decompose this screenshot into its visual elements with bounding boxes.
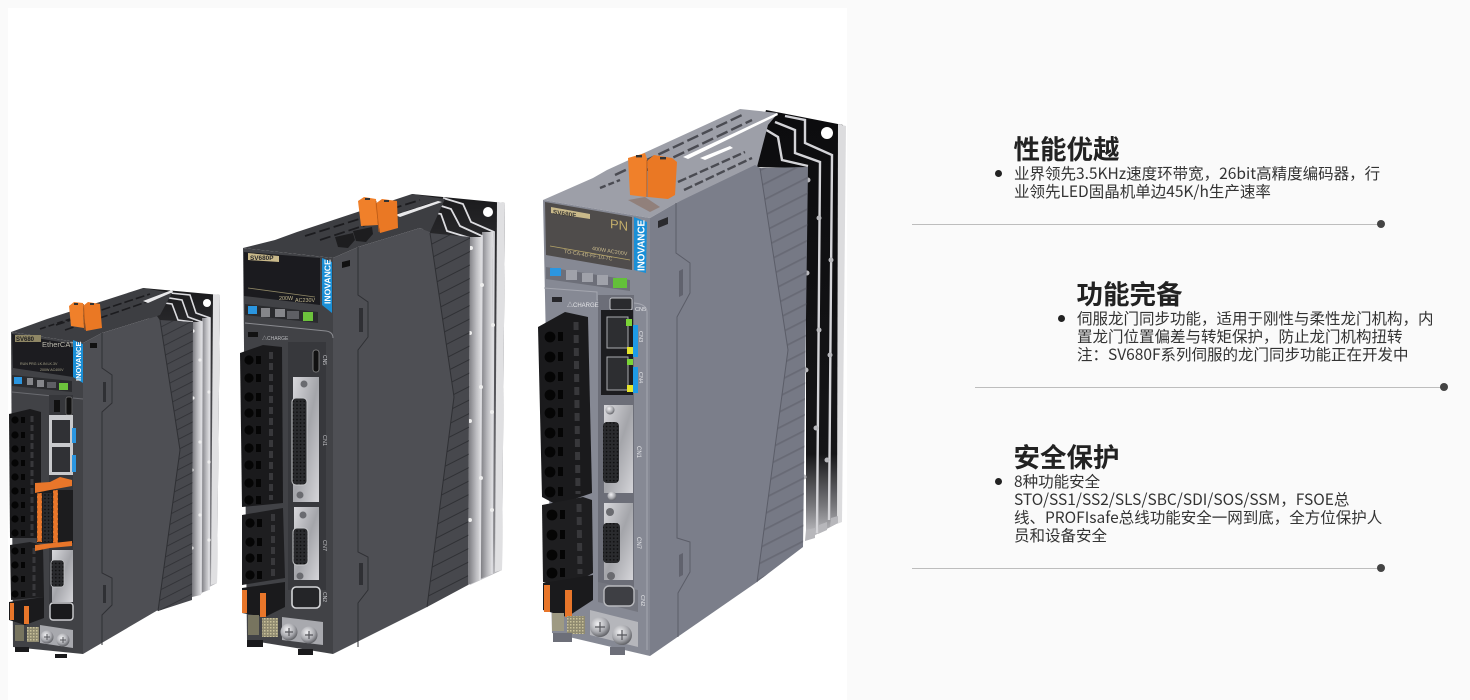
CN1 D-sub connector bbox=[603, 405, 641, 500]
display window bbox=[244, 252, 320, 305]
display window: SV680P bbox=[250, 255, 274, 262]
CN1 D-sub connector: CN1 bbox=[321, 435, 327, 446]
label and ground screws bbox=[552, 610, 638, 655]
VGA connector bbox=[51, 550, 73, 602]
charge indicator and USB port bbox=[552, 297, 646, 313]
divider with end dot: safety bbox=[912, 564, 1385, 572]
orange top connectors bbox=[628, 153, 677, 199]
bullet text: performance: 业界领先3.5KHz速度环带宽，26bit高精度编码器，行 bbox=[1014, 162, 1380, 184]
top vented roof bbox=[243, 194, 445, 258]
charge indicator and USB port: △CHARGE bbox=[262, 335, 289, 342]
bullet text: safety: STO/SS1/SS2/SLS/SBC/SDI/SOS/SSM，FSOE总 bbox=[1014, 488, 1349, 510]
INOVANCE label: INOVANCE bbox=[74, 341, 83, 381]
heading: performance: 性能优越 bbox=[1014, 128, 1120, 167]
display window: PN bbox=[610, 216, 628, 234]
CN2 port: CN2 bbox=[321, 592, 327, 602]
display window bbox=[12, 334, 75, 377]
feature block: functions bbox=[1058, 273, 1434, 365]
device: large drive SV680F PN bbox=[538, 109, 846, 656]
display window: 200W bbox=[279, 296, 294, 302]
black terminal block lower bbox=[542, 497, 593, 587]
front panel bbox=[543, 200, 650, 656]
side cover bbox=[333, 228, 470, 654]
CN7 D-sub connector bbox=[603, 503, 641, 580]
black terminal block upper bbox=[240, 345, 283, 507]
INOVANCE label: INOVANCE bbox=[322, 259, 332, 304]
front panel bbox=[11, 332, 83, 654]
CN2 port bbox=[598, 582, 645, 612]
black terminal block lower bbox=[10, 542, 44, 600]
feature block: safety bbox=[995, 436, 1382, 546]
CN1 D-sub connector: CN1 bbox=[635, 446, 641, 459]
display window bbox=[545, 202, 632, 270]
display window: TO-CA-4D-FF-10-7C bbox=[564, 249, 613, 263]
orange power plug bbox=[242, 582, 285, 617]
bullet text: performance: 业领先LED固晶机单边45K/h生产速率 bbox=[1014, 180, 1271, 202]
label and ground screws bbox=[247, 615, 323, 655]
side cover bbox=[650, 165, 808, 656]
display window: SV680F bbox=[553, 209, 576, 220]
display window: AC230V bbox=[295, 298, 315, 304]
heading: safety: 安全保护 bbox=[1014, 436, 1120, 475]
device: small drive SV680 EtherCAT bbox=[9, 288, 220, 658]
CN2 port: CN2 bbox=[639, 595, 645, 606]
CN7 D-sub connector: CN7 bbox=[321, 540, 327, 551]
heat sink fins bbox=[750, 110, 846, 541]
device: medium drive SV680P bbox=[240, 194, 505, 655]
display window: EtherCAT bbox=[42, 340, 75, 349]
display window: 200W AC400V bbox=[40, 368, 64, 372]
heading: functions: 功能完备 bbox=[1076, 273, 1182, 312]
charge indicator and USB port: △CHARGE bbox=[567, 301, 599, 309]
INOVANCE label: INOVANCE bbox=[636, 220, 648, 271]
bullet text: functions: 置龙门位置偏差与转矩保护，防止龙门机构扭转 bbox=[1077, 325, 1403, 347]
front panel bbox=[243, 248, 333, 654]
bullet text: performance bbox=[1014, 162, 1380, 202]
white product panel bbox=[8, 8, 847, 700]
keypad bbox=[546, 267, 630, 291]
CN7 D-sub connector: CN7 bbox=[635, 537, 641, 550]
orange top connectors bbox=[358, 197, 398, 233]
ethernet ports bbox=[49, 397, 76, 475]
top vented roof bbox=[543, 109, 778, 218]
bullet text: safety: 8种功能安全 bbox=[1014, 470, 1100, 492]
black terminal block upper bbox=[538, 312, 592, 505]
bullet text: functions bbox=[1077, 307, 1434, 365]
feature block: performance bbox=[995, 128, 1380, 202]
CN7 D-sub connector bbox=[293, 507, 327, 580]
bullet text: safety: 线、PROFIsafe总线功能安全一网到底，全方位保护人 bbox=[1014, 506, 1382, 528]
CN2 port bbox=[292, 587, 327, 608]
heat sink fins bbox=[143, 288, 220, 597]
black terminal block upper bbox=[9, 409, 41, 538]
charge indicator and USB port bbox=[248, 332, 327, 372]
side cover bbox=[83, 316, 193, 654]
top vented roof bbox=[11, 288, 173, 343]
display window: RUN PRG LK.IN LK.3V bbox=[20, 362, 58, 366]
label and ground screws bbox=[15, 625, 73, 658]
ethernet ports CN3 CN4: CN4 bbox=[637, 372, 643, 383]
heat sink fins bbox=[412, 194, 505, 585]
orange power plug bbox=[9, 597, 44, 625]
HDMI port bbox=[50, 603, 73, 620]
orange top connectors bbox=[69, 302, 102, 331]
display window: SV680 bbox=[16, 337, 35, 343]
black terminal block lower bbox=[242, 508, 285, 585]
bullet text: functions: 注：SV680F系列伺服的龙门同步功能正在开发中 bbox=[1077, 343, 1409, 365]
charge indicator and USB port: CN5 bbox=[635, 307, 646, 313]
bullet text: safety: 员和设备安全 bbox=[1014, 524, 1107, 546]
black roof knobs bbox=[335, 227, 373, 248]
keypad bbox=[12, 375, 72, 392]
divider with end dot: functions bbox=[975, 383, 1448, 391]
charge indicator and USB port: CN5 bbox=[321, 355, 327, 365]
display window: 400W AC200V bbox=[592, 246, 628, 258]
bullet text: safety bbox=[1014, 470, 1382, 546]
orange power plug bbox=[543, 575, 593, 617]
divider with end dot: performance bbox=[912, 220, 1385, 228]
CN1 D-sub connector bbox=[292, 377, 327, 502]
keypad bbox=[245, 304, 318, 323]
bullet text: functions: 伺服龙门同步功能，适用于刚性与柔性龙门机构，内 bbox=[1077, 307, 1434, 329]
orange latch connector bbox=[35, 477, 73, 551]
ethernet ports CN3 CN4 bbox=[601, 310, 643, 395]
ethernet ports CN3 CN4: CN3 bbox=[637, 331, 643, 342]
